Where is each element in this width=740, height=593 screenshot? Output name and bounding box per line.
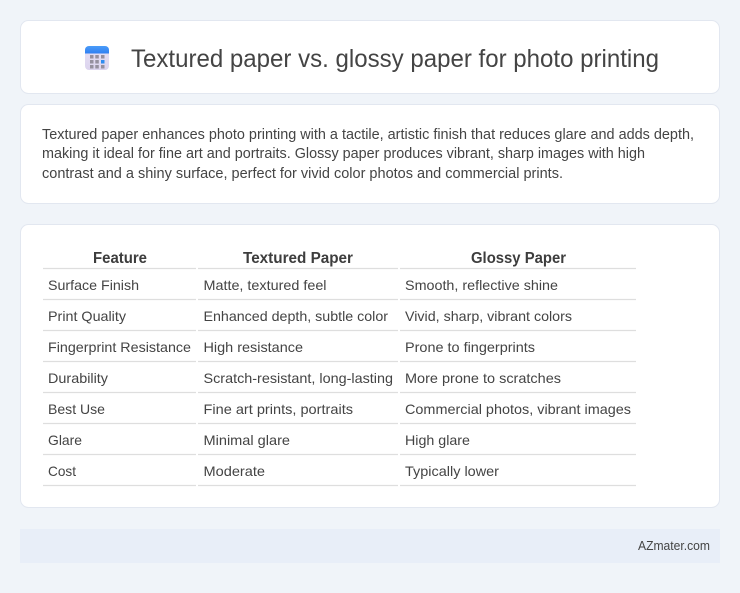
- title: Textured paper vs. glossy paper for photo printing: [131, 45, 659, 73]
- table header row: Feature: [93, 250, 147, 267]
- row: surface finish: [48, 277, 558, 293]
- row: best use: [48, 401, 631, 417]
- row: best use: Fine art prints, portraits: [204, 401, 353, 417]
- description panel: [20, 104, 720, 204]
- row: fingerprint resistance: [48, 339, 535, 355]
- row: fingerprint resistance: High resistance: [204, 339, 303, 355]
- row: print quality: Print Quality: [48, 308, 126, 324]
- row: glare: Glare: [48, 432, 82, 448]
- footer source text: AZmater.com: [638, 539, 710, 553]
- table panel: [20, 224, 720, 508]
- table header row: [93, 250, 566, 267]
- row: best use: Best Use: [48, 401, 105, 417]
- comparison table: [43, 250, 636, 486]
- description text: Textured paper enhances photo printing with a tactile, artistic finish that reduces glare and adds depth,: [42, 127, 694, 143]
- header panel: [20, 20, 720, 94]
- row: cost: Moderate: [204, 463, 265, 479]
- description text: contrast and a shiny surface, perfect for vivid color photos and commercial prints.: [42, 166, 563, 182]
- row: fingerprint resistance: Fingerprint Resistance: [48, 339, 191, 355]
- icon: calendar: [85, 46, 109, 70]
- row: best use: Commercial photos, vibrant images: [405, 401, 631, 417]
- row: print quality: [48, 308, 572, 324]
- row: print quality: Enhanced depth, subtle color: [204, 308, 388, 324]
- row: surface finish: Smooth, reflective shine: [405, 277, 558, 293]
- row: surface finish: Surface Finish: [48, 277, 139, 293]
- description text: making it ideal for fine art and portraits. Glossy paper produces vibrant, sharp images with high: [42, 146, 645, 162]
- row: glare: High glare: [405, 432, 470, 448]
- row: print quality: Vivid, sharp, vibrant colors: [405, 308, 572, 324]
- row: fingerprint resistance: Prone to fingerprints: [405, 339, 535, 355]
- table header row: Glossy Paper: [471, 250, 566, 267]
- footer bar: [20, 529, 720, 563]
- row: durability: Durability: [48, 370, 108, 386]
- row: durability: [48, 370, 561, 386]
- row: cost: Typically lower: [405, 463, 499, 479]
- row: cost: Cost: [48, 463, 76, 479]
- table header row: Textured Paper: [243, 250, 353, 267]
- row: surface finish: Matte, textured feel: [204, 277, 326, 293]
- description text: [42, 127, 694, 182]
- row: glare: Minimal glare: [204, 432, 290, 448]
- row: glare: [48, 432, 470, 448]
- row: cost: [48, 463, 499, 479]
- row: durability: More prone to scratches: [405, 370, 561, 386]
- row: durability: Scratch-resistant, long-lasting: [204, 370, 393, 386]
